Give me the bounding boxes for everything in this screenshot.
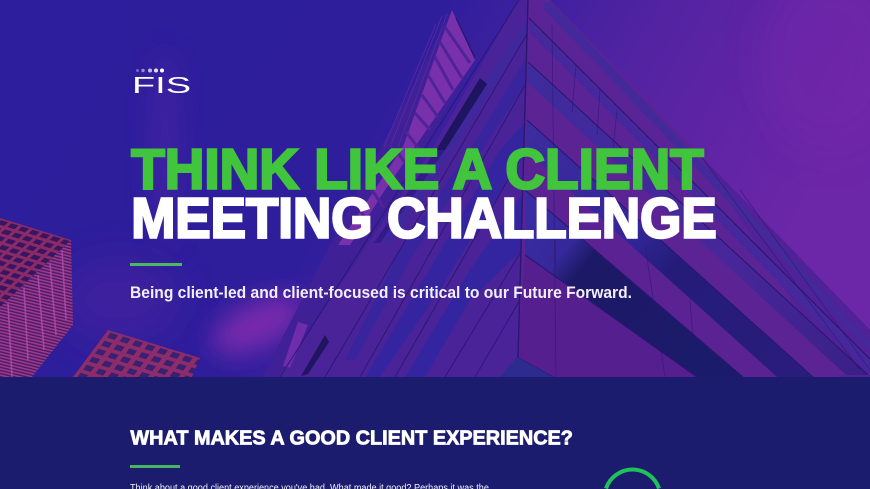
left foreground tower [0,218,73,377]
left face [278,0,528,377]
rear tower [262,10,475,377]
right face [518,0,870,377]
title: MEETING CHALLENGE [131,187,717,251]
title [131,138,717,251]
lower corner window [500,357,553,377]
section heading: WHAT MAKES A GOOD CLIENT EXPERIENCE? [130,426,573,450]
lower foreground tower [73,330,200,377]
FIS logo [132,68,191,98]
main tower [278,0,870,377]
title divider [130,263,182,266]
hero photo background [0,0,870,377]
lower panel [0,377,870,489]
corner mullion [518,0,528,357]
subtitle: Being client-led and client-focused is critical to our Future Forward. [130,284,632,302]
section divider [130,465,180,468]
FIS logo: FIS [132,72,191,98]
icon: green circle [606,470,659,488]
title: THINK LIKE A CLIENT [131,138,704,202]
